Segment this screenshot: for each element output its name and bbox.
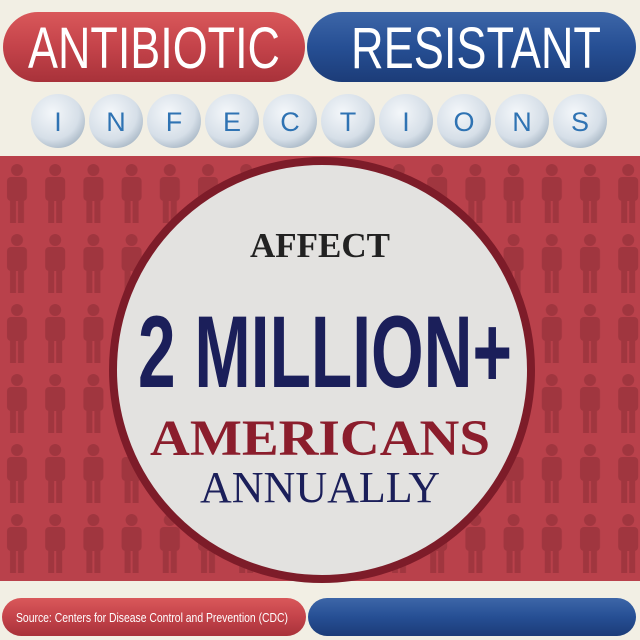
text: americans: AMERICANS xyxy=(150,411,490,467)
tablets: infections: E xyxy=(223,107,241,137)
text: affect: AFFECT xyxy=(250,226,390,265)
tablets: infections: T xyxy=(340,107,356,137)
tablets: infections: F xyxy=(166,107,182,137)
tablets: infections: C xyxy=(280,107,300,137)
text: annually: ANNUALLY xyxy=(200,463,440,512)
pill: antibiotic: ANTIBIOTIC xyxy=(28,16,280,81)
footer pill: source: Source: Centers for Disease Control and Prevention (CDC) xyxy=(16,610,288,625)
panel: people background xyxy=(0,156,640,581)
tablets: infections: S xyxy=(571,107,589,137)
tablets: infections: O xyxy=(453,107,475,137)
tablets: infections: I xyxy=(54,107,62,137)
circle callout xyxy=(113,161,531,579)
tablets: infections xyxy=(31,94,607,148)
footer pill: blue xyxy=(308,598,636,636)
tablets: infections: I xyxy=(402,107,410,137)
tablets: infections: N xyxy=(106,107,126,137)
footer pill: source xyxy=(2,598,306,636)
tablets: infections: N xyxy=(512,107,532,137)
